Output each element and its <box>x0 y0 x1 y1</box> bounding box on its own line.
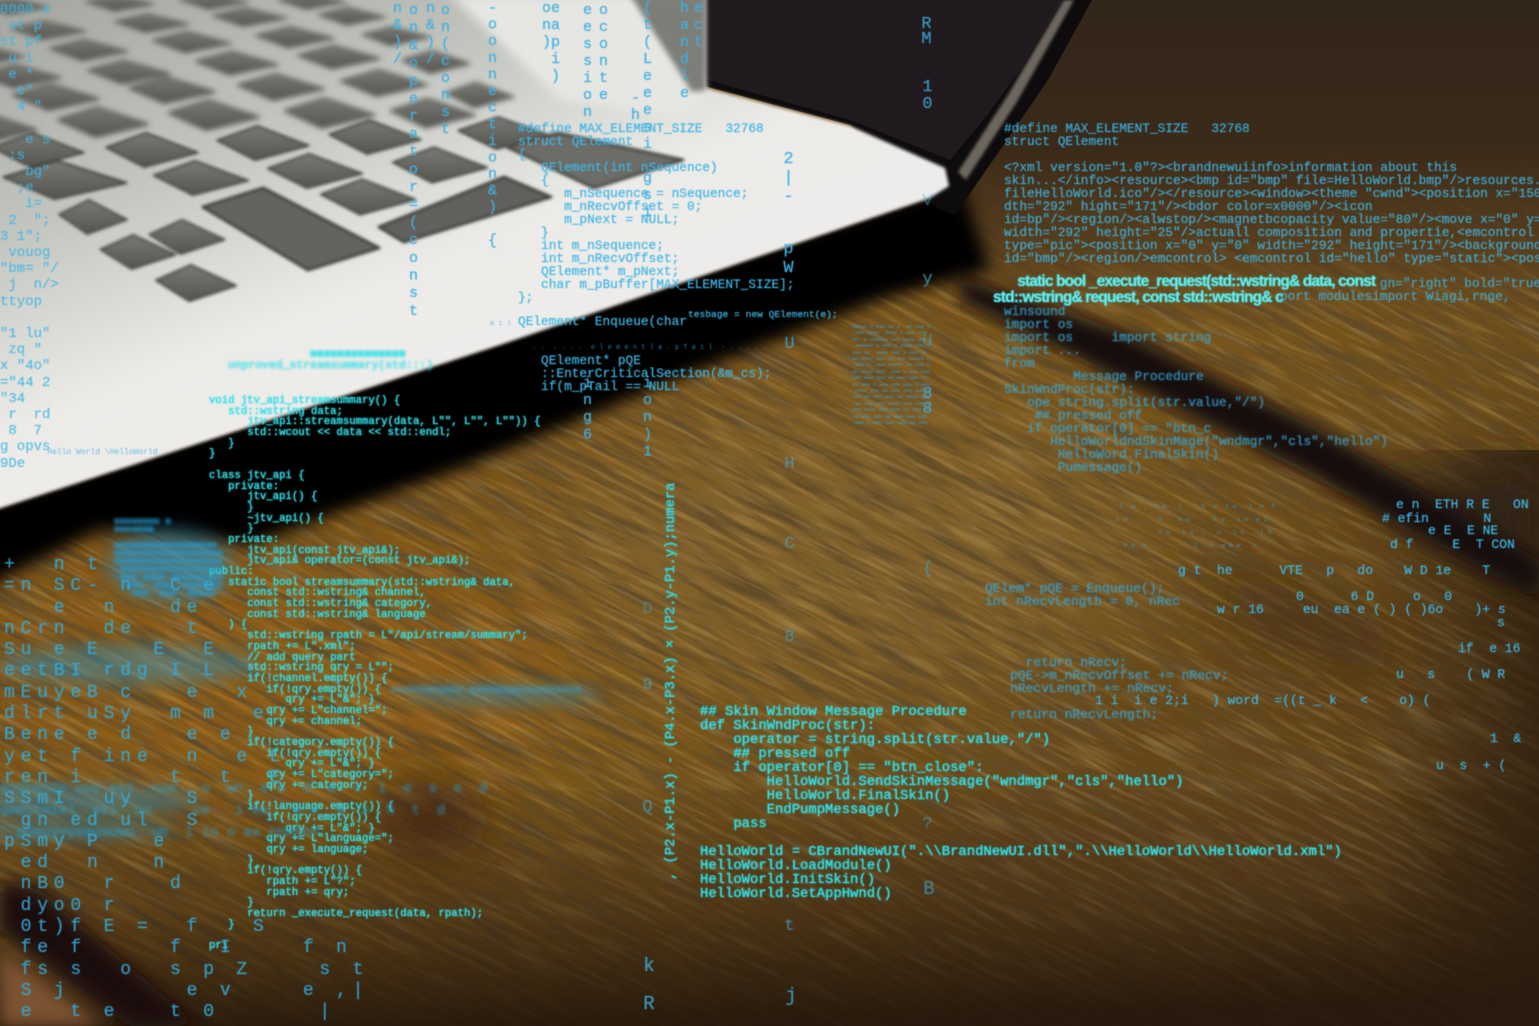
text: RM <box>917 15 936 45</box>
text: s <box>1497 615 1505 630</box>
vertical letter column at x 646 lower <box>638 600 660 1015</box>
text: oconte <box>595 2 612 104</box>
code block: enqueue function <box>490 309 838 394</box>
text: Q <box>638 798 657 817</box>
text: 1 i i e 2;i ) word =((t _ k < o) ( <box>1095 693 1430 708</box>
vertical letter column at x 788 <box>779 150 802 1007</box>
text: U <box>918 332 937 351</box>
tonal shading over grain <box>960 0 1539 330</box>
text: U <box>780 335 799 354</box>
text: R <box>638 993 660 1015</box>
text: t <box>780 917 799 936</box>
text: ing6 <box>579 375 596 443</box>
text: on&operator=(const <box>405 2 422 321</box>
code block: Python skin message procedure: ## Skin Window Message Procedure def SkinWndProc(str): operator = string.split(str.value,"/") ## pressed off if operator[0] == "btn_close": HelloWorld.SendSkinMessage("wndmgr","cls","hello") HelloWorld.FinalSkin() EndPumpMessage() pass HelloWorld = CBrandNewUI(".\\BrandNewUI.dll",".\\HelloWorld\\HelloWorld.xml") HelloWorld.LoadModule() HelloWorld.InitSkin() HelloWorld.SetAppHwnd() <box>700 704 1342 902</box>
matrix letters upper left: 0000 e st p st pf u i e * e" 4 " e s ;s bg" ;e i= 2 "; 3 1"; vouog "bm= "/ j n/> ttyop "1 lu" zq " x "4o" ="44 2 "34 r rd 8 7 g opvs 9De <box>0 2 59 472</box>
text: on) <box>538 0 555 51</box>
text: w r 16 eu ea e ( ) ( )6o )+ s <box>1217 602 1506 617</box>
text: g t he VTE p do W D 1e T <box>1178 563 1490 578</box>
text: -oonnection&) { <box>484 0 501 249</box>
text: handle <box>676 0 693 102</box>
text: { <box>918 560 937 579</box>
text: n&)/ <box>389 0 406 68</box>
blue haze behind code <box>0 527 600 839</box>
text: -h <box>627 90 644 124</box>
text: 8 <box>780 628 799 647</box>
text: j <box>780 985 802 1007</box>
text: d f E T CON <box>1390 537 1515 552</box>
tiny code speckles right: . i w . h w i . h w i w . i w h . i w . . h w w. . h w . i w w i . . h w i w . w i w . i h . . h w w . . i . h w w w . i <box>1100 503 1283 549</box>
text: QElement* Enqueue(char QElement* pQE ::EnterCriticalSection(&m_cs); if(m_pTail == NULL <box>518 314 771 394</box>
keyboard keys: front rows <box>0 117 683 301</box>
text: ? <box>918 815 937 834</box>
text: D <box>638 600 657 619</box>
code block: blurred return lines: return nRecv; pQE->m_nRecvOffset += nRecv; nRecvLength += nRecv; return nRecvLength; <box>1010 655 1228 722</box>
text: H <box>780 455 799 474</box>
text: (t(Leeesi gsi <box>639 0 656 221</box>
code block: blurred receive function: QElem* pQE = Enqueue(); int nRecvLength = 0, nRec <box>985 581 1180 609</box>
code block: blurred Python procedure on right: winsound import os import os import string import ... from Message Procedure SkinWndProc(str): ope string.split(str.value,"/") ## pressed off if operator[0] == "btn_c HelloWorldndSkinMage("wndmgr","cls","hello") HelloWord.FinalSkin() Pumessage() <box>1004 304 1388 475</box>
blurred band across bottom left: enShmSSn uuy eei nue u wn e e d e s i e s e d gmmutmiel eti uu oe i ee e e a n h t d pSmuyyyemuuuwu un i in o ee nnnnnn <box>0 781 487 841</box>
rotated formula: , (P2.x-P1.x) - (P4.x-P3.x) × (P2.y-P1.y);numera <box>664 483 679 880</box>
laptop deck <box>0 0 949 510</box>
faint hello world strip: Hello World \HelloWorld <box>47 448 158 457</box>
text: a i l . . . . . . e l e m e n t l a . p T a i l - . . . . . . <box>490 320 776 352</box>
keyboard keys: far rows <box>0 0 514 143</box>
text: V <box>918 192 937 211</box>
blurred code strip left: ■■■■■■■■■■■ ■■■■■■■■■■■■■■■■■ <box>390 685 581 697</box>
tiny code speckles centre: wwwww w www ww w ww www w www wwww wwww w www www ww w wwwwww www wwww ww w wwwwww w www w wwww www w www ww wwww www w www ww ww wwww www ww www wwwww w www w www wwwww ww www w ww wwww www www w www www www www www ww www www ww ww www w www www www w www wwww www ww www www www w www ww www www ww wwww www ww www www wwww www www w www wwww www www ww www ww ww www www ww www www www www w www www www ww www <box>852 324 930 426</box>
code block: left API class: void jtv_api_streamsummary() { std::wstring data; jtv_api::streamsummary(data, L"", L"", L"")) { std::wcout << data << std::endl; } } class jtv_api { private: jtv_api() { } ~jtv_api() { } private: jtv_api(const jtv_api&); jtv_api& operator=(const jtv_api&); public: static bool streamsummary(std::wstring& data, const std::wstring& channel, const std::wstring& category, const std::wstring& language ) { std::wstring rpath = L"/api/stream/summary"; rpath += L".xml"; // add query part std::wstring qry = L""; if(!channel.empty()) { if(!qry.empty()) { qry += L"&"; } qry += L"channel="; qry += channel; } if(!category.empty()) { if(!qry.empty()) { qry += L"&"; } qry += L"category="; qry += category; } if(!language.empty()) { if(!qry.empty()) { qry += L"&"; } qry += L"language="; qry += language; } if(!qry.empty()) { rpath += L"?"; rpath += qry; } return _execute_request(data, rpath); } pri <box>209 395 541 952</box>
highlighted function signature: static bool _execute_request(std::wstring& data, const std::wstring& request, const std::wstring& c <box>993 273 1375 306</box>
text: k <box>638 955 660 977</box>
text: eapi) <box>547 0 564 85</box>
text: 0 6 D o 0 <box>1296 589 1452 604</box>
text: u s + ( <box>1436 758 1506 773</box>
text: e n ETH R E ON <box>1396 497 1529 512</box>
text: 1 & <box>1490 731 1521 746</box>
vertical code columns over keyboard <box>389 0 707 460</box>
text: u s ( W R <box>1396 667 1505 682</box>
text: y <box>918 270 937 289</box>
text: C <box>780 535 799 554</box>
matrix letters lower left: + n t =n SC- n C e e n de nCrn de t Su e E E E eetBI rdg I L mEuyeB c e x dlrt uSy m m e Bene e d e e yet f ine n e L ren i t t E SSmI uy S gn ed ul S pSmy P e ed n n nB0 r d dyo0 r 0t)f E = f S fe f f I f n fs s o s p Z s t S j e v e ,| e t e t 0 | <box>4 555 369 1022</box>
text: 2|- <box>779 150 798 207</box>
text: tesbage = new QElement(e); <box>688 309 838 320</box>
matrix letters lower right <box>1095 497 1529 773</box>
smudged dark blue code block left: ■■■■■■■■ ■ ■■■■■■■ ■■■■■■■■■■■■■■■■■■ ■■■■■■■■■■■■■■■■■■■ ■■■■■■■■■■■■■■■■■■■ ■■■■■■■■■■■■■■■■■■ ■■■ ■■■■ ■■■■■■■■■ ■■■ ■■■ ■■■■■■■ ■■■ ■■■ ■■■■■ <box>114 516 222 599</box>
code block: top centre QElement struct: #define MAX_ELEMENT_SIZE 32768 struct QElement { QElement(int nSequence) { m_nSequence = nSequence; m_nRecvOffset = 0; m_pNext = NULL; } int m_nSequence; int m_nRecvOffset; QElement* m_pNext; char m_pBuffer[MAX_ELEMENT_SIZE]; }; <box>518 121 794 305</box>
laptop screen <box>700 0 1092 215</box>
text: ect <box>690 0 707 51</box>
shadow beneath laptop <box>0 180 990 590</box>
text: # efin N <box>1382 511 1491 526</box>
text: ion)1 <box>639 375 656 460</box>
text: if e 16 <box>1458 641 1520 656</box>
text: 88 <box>918 385 937 415</box>
text: e E E NE <box>1428 523 1498 538</box>
vertical letter column at x 926 <box>917 15 940 900</box>
code fragments beside highlighted signature: gn="right" bold="true port modulesimport Wiagi,rnge, <box>1280 276 1539 304</box>
text: B <box>918 878 940 900</box>
text: pW <box>779 240 798 278</box>
text: eession <box>579 2 596 121</box>
text: on(const <box>437 2 454 138</box>
text: 10 <box>918 78 937 112</box>
text: 9 <box>638 676 657 695</box>
hinge key band <box>630 0 706 92</box>
smudged code line on laptop deck: ■■■■■■■■■■■■■■ unproved_streamsummary(std:::) <box>228 349 433 372</box>
white strip beside keyboard <box>450 0 706 118</box>
text: n&)/ <box>422 0 439 68</box>
